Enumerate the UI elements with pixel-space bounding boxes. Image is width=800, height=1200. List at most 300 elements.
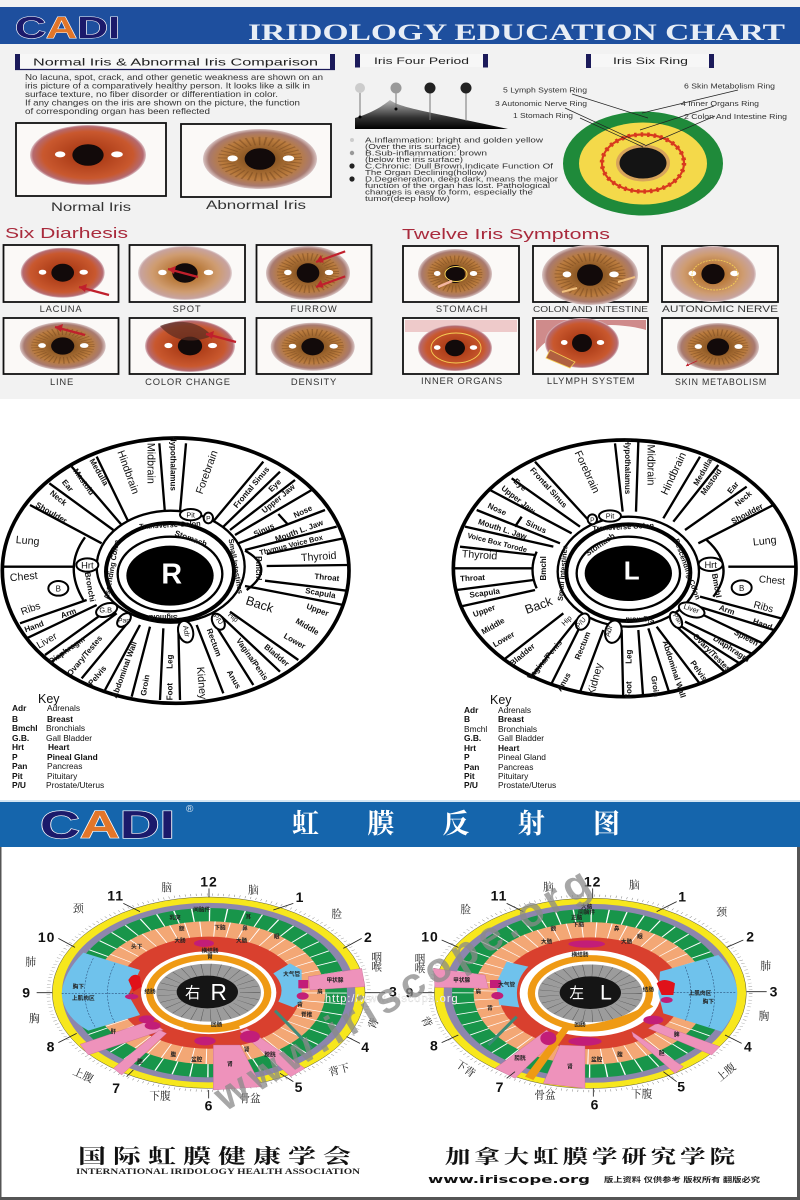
marker: red heart (128, 975, 142, 992)
labels: right iris organs: Neck (48, 489, 69, 508)
legend: right iris key: Bmchl (12, 723, 38, 733)
footer: canadian iris institute: 加拿大虹膜学研究学院 (445, 1145, 739, 1168)
labels: left iris organs: Ear (725, 480, 741, 496)
labels: right iris organs: Kidney (194, 666, 209, 700)
legend: four period stages: D.Degeneration, deep dark, means the major (365, 174, 559, 184)
legend: left iris key: Adrenals (498, 705, 531, 715)
tiny organ labels: right map: 盆腔 (191, 1056, 203, 1064)
legend: right iris key: Hrt (12, 742, 24, 752)
hour labels: left map (406, 874, 778, 1113)
labels: left iris organs: Mastoid (699, 467, 724, 497)
tiny organ labels: left map: 眼 (637, 933, 643, 940)
tiny organ labels: right map: 大肠 (236, 937, 248, 945)
labels: six rings: 1 Stomach Ring (513, 113, 573, 120)
body region labels: right map: 喉 (371, 962, 382, 974)
legend: right iris key: Pineal Gland (47, 752, 98, 762)
photo: color change: COLOR CHANGE (145, 376, 231, 387)
labels: left iris organs: Mouth L. Jaw (477, 517, 529, 542)
labels: right iris organs: Nose (292, 503, 314, 520)
ring leader lines (565, 90, 738, 147)
labels: left iris organs: Upper Jaw (500, 484, 538, 516)
tiny organ labels: right map: 额 (179, 925, 185, 933)
legend: left iris key: Gall Bladder (498, 733, 544, 743)
legend: left iris key: Pit (464, 771, 475, 781)
legend: left iris key: Pineal Gland (498, 752, 546, 762)
tiny organ labels: right map: 胃 (207, 953, 213, 960)
tiny organ labels: left map: 鼻 (614, 925, 620, 933)
tiny organ labels: left map: 正脑 (571, 913, 583, 921)
labels: left iris organs: Hypothalamus (623, 439, 632, 495)
labels: left iris organs: Thyroid (461, 548, 498, 563)
photo: normal iris (16, 123, 166, 214)
legend: four period stages: A.Inflammation: bright and golden yellow (365, 136, 544, 144)
hour labels: left map: 11 (491, 888, 507, 904)
labels: right iris organs: Anus (225, 669, 243, 691)
hour labels: right map: 8 (47, 1038, 55, 1054)
heading box: normal vs abnormal (15, 54, 335, 70)
labels: right iris organs: Liver (35, 631, 60, 651)
photo: autonomic nerve (662, 246, 778, 314)
legend: right iris key: Pituitary (47, 771, 78, 781)
legend: left iris key: P/U (464, 780, 478, 790)
sector: right blue bronchial (273, 963, 302, 1007)
chart: four period depth (355, 82, 508, 129)
tiny organ labels: right map: 下脑 (214, 923, 226, 931)
tiny organ labels: left map: 大肠 (621, 937, 633, 945)
ovals: right iris key organs: P (206, 516, 211, 523)
labels: right iris organs: Leg (165, 654, 174, 669)
labels: right iris organs: Shoulder (34, 500, 68, 525)
tiny organ labels: right map: 间脑件 (193, 906, 210, 914)
photo: colon and intestine: COLON AND INTESTINE (533, 305, 648, 314)
labels: left iris organs: Kidney (585, 661, 606, 697)
photo: line (4, 318, 118, 387)
labels: left iris organs: Hindbrain (659, 450, 689, 497)
labels: right iris organs: Hindbrain (114, 449, 141, 496)
tiny organ labels: right map: 肝 (111, 1028, 117, 1035)
hour labels: left map: 3 (770, 983, 778, 999)
hour labels: right map: 5 (295, 1079, 303, 1095)
labels: left iris organs: Vagina/Penis (525, 638, 564, 682)
text block: comparison description: If any changes on the iris are shown on the picture, the function (25, 98, 300, 108)
tiny organ labels: right map: 耳 (246, 913, 252, 920)
labels: right iris organs: Mastoid (71, 467, 96, 497)
body region labels: right map: 下腹 (149, 1090, 171, 1103)
heading box: normal vs abnormal: Normal Iris & Abnormal Iris Comparison (33, 56, 318, 68)
hour labels: right map: 3 (389, 984, 398, 1000)
footer: canadian iris institute (428, 1145, 760, 1186)
ovals: right iris key organs: Adr (181, 625, 192, 638)
labels: right iris organs: Abdominal Wall (110, 640, 139, 699)
tiny organ labels: left map: 横结肠 (572, 951, 589, 959)
photo: spot (130, 245, 245, 314)
footer: international iridology health association (76, 1144, 360, 1176)
labels: right iris organs: Hand (23, 619, 45, 634)
labels: left iris organs: Eye (512, 477, 529, 493)
tiny organ labels: right map: 胸下 (73, 982, 84, 990)
text block: comparison description: of corresponding organ has been reflected (25, 107, 210, 116)
labels: left iris organs: Diaphragm (711, 634, 751, 664)
labels: left iris organs: Pelvis (688, 659, 709, 683)
legend: four period stages: function of the organ has lost. Pathological (365, 181, 550, 190)
tiny organ labels: right map (72, 906, 344, 1068)
tiny organ labels: right map: 上肌肉区 (72, 994, 95, 1002)
body region labels: left map: 咽 (415, 954, 426, 966)
legend: right iris key: G.B. (12, 733, 29, 743)
photo: lymph system: LLYMPH SYSTEM (547, 375, 635, 386)
hour labels: right map: 2 (364, 929, 373, 945)
tiny organ labels: right map: 头下 (131, 942, 143, 950)
sector: thyroid, pink (308, 968, 365, 990)
body region labels: right map: 脸 (331, 908, 342, 921)
tiny organ labels: left map: 膀胱 (514, 1054, 526, 1062)
tiny organ labels: right map: 背 (297, 1001, 303, 1009)
body region labels: left map: 胸 (759, 1010, 770, 1023)
diagram: six ring iris (563, 90, 738, 216)
legend: right iris key: Pancreas (47, 761, 82, 771)
tiny organ labels: right map: 结肠 (144, 987, 156, 995)
body region labels: right map: 胸 (29, 1012, 40, 1025)
duct: teal line (488, 1017, 517, 1045)
tiny organ labels: right map: 肩 (317, 987, 323, 995)
legend: left iris key: Bmchl (464, 724, 487, 734)
labels: left iris organs: Spleen (732, 628, 760, 648)
labels: left iris organs: Frontal Sinus (528, 466, 569, 510)
labels: right iris organs (9, 436, 340, 700)
panel: education chart background (0, 0, 800, 399)
labels: right iris organs: Diaphragm (47, 635, 87, 666)
labels: right iris organs: Pelvis (87, 664, 109, 687)
legend: left iris key: Bronchials (498, 724, 537, 734)
tiny organ labels: right map: 胆 (137, 1058, 143, 1065)
title: IRIDOLOGY EDUCATION CHART (248, 20, 785, 45)
legend: right iris key (12, 692, 104, 790)
tiny organ labels: right map: 腹 (171, 1051, 177, 1059)
legend: left iris key: Pancreas (498, 762, 533, 772)
photo: autonomic nerve: AUTONOMIC NERVE (662, 304, 778, 314)
sector: lung and chest, blue (62, 953, 140, 1031)
text block: comparison description (25, 73, 323, 116)
tiny organ labels: left map: 大肠 (541, 937, 553, 945)
labels: six rings: 3 Autonomic Nerve Ring (495, 101, 587, 108)
legend: right iris key: Adrenals (47, 703, 80, 713)
text block: comparison description: No lacuna, spot, crack, and other genetic weakness are shown on an (25, 73, 323, 82)
body region labels: left map: 骨盆 (534, 1089, 556, 1102)
body region labels: right map: 背 (365, 1016, 382, 1031)
panel: chinese chart frame (0, 847, 800, 1200)
labels: left iris organs: Nose (486, 501, 508, 518)
labels: left iris organs: Anus (555, 671, 573, 693)
labels: right iris organs: Rectum (205, 627, 223, 658)
body region labels: right map: 脑 (248, 885, 259, 897)
labels: left iris organs: Stomach (584, 531, 617, 558)
legend: right iris key: Key (38, 692, 60, 706)
legend: left iris key: Pan (464, 762, 479, 772)
arcs: chest subdivisions (663, 960, 737, 1028)
ovals: right iris key organs: Pit (186, 510, 195, 519)
labels: right iris organs: Bronchi (83, 571, 97, 603)
tiny organ labels: right map: 回肠 (211, 1021, 223, 1029)
tiny organ labels: right map: 大气管 (283, 970, 300, 978)
body region labels: right map: 上腹 (71, 1065, 96, 1086)
legend: four period stages: tumor(deep hollow) (365, 194, 451, 203)
labels: right iris organs: Ribs (20, 601, 42, 618)
legend: left iris key: Breast (498, 714, 524, 724)
ovals: left iris key organs: Pit (606, 512, 614, 521)
marker: red heart (657, 980, 675, 995)
body region labels: left map: 下腹 (631, 1087, 653, 1100)
tiny organ labels: right map: 脊椎 (301, 1011, 313, 1019)
photo: skin metabolism (662, 318, 778, 387)
labels: right iris organs: Foot (165, 683, 174, 700)
hour labels: right map: 6 (205, 1098, 213, 1114)
logo: CADI: C A DI (40, 804, 175, 847)
panel: right iris wheel (2, 436, 349, 703)
pupil: right map: 右 (185, 985, 200, 1002)
legend: right iris key: Pan (12, 761, 27, 771)
body region labels: left map: 脑 (629, 880, 640, 892)
labels: right iris organs: Back (244, 594, 276, 616)
text block: comparison description: surface texture, no fiber disorder or differentiation in color. (25, 90, 278, 99)
labels: right iris organs: Throat (314, 572, 340, 583)
hour labels: left map: 10 (421, 928, 439, 944)
labels: left iris organs: Leg (625, 649, 634, 664)
tiny organ labels: right map: 眼 (274, 933, 280, 940)
hour ticks: left map (418, 888, 767, 1097)
labels: right iris organs: Mouth L. Jaw (274, 518, 325, 544)
tiny organ labels: left map (453, 902, 714, 1070)
hour labels: left map: 2 (746, 928, 755, 944)
labels: right iris organs: Ascending Colon (102, 539, 121, 600)
labels: left iris organs: Foot (625, 681, 634, 699)
legend: right iris key: Adr (12, 703, 27, 713)
legend: left iris key: Pituitary (498, 771, 529, 781)
tiny organ labels: left map: 间脑件 (578, 908, 595, 916)
labels: right iris organs: Transverse Colon (139, 519, 201, 531)
labels: right iris organs: Sinus (252, 521, 276, 539)
body region labels: left map: 脸 (460, 903, 471, 916)
tiny organ labels: left map: 额 (551, 925, 557, 933)
legend: left iris key: Prostate/Uterus (498, 780, 556, 790)
hour labels: right map: 10 (38, 929, 55, 945)
legend: right iris key: Prostate/Uterus (46, 780, 104, 790)
pupil: right map (177, 976, 238, 1008)
photo: density: DENSITY (291, 376, 337, 387)
rings: right map (48, 895, 369, 1091)
tiny organ labels: left map: 甲状腺 (453, 976, 470, 984)
labels: right iris organs: Midbrain (144, 443, 156, 484)
heading box: iris four period (355, 54, 488, 68)
labels: left iris organs: Ovary/Testes (691, 632, 733, 674)
pupil: R (126, 546, 214, 606)
hour labels: left map: 7 (496, 1079, 504, 1095)
sector: lung and chest, blue (658, 955, 737, 1032)
tiny organ labels: right map: 鼻 (242, 924, 248, 932)
body region labels: left map: 下背 (453, 1057, 478, 1080)
footer: international iridology health association: 国际虹膜健康学会 (78, 1144, 358, 1168)
ovals: left iris key organs (559, 510, 752, 645)
strip: orange descending (525, 1004, 653, 1080)
pupil: right map: R (210, 979, 227, 1005)
legend: left iris key: Adr (464, 705, 479, 715)
chart: left iris reflex map (406, 874, 778, 1113)
hour labels: right map: 1 (296, 889, 304, 905)
labels: right iris organs: Ear (60, 478, 75, 494)
labels: left iris organs: Lung (752, 534, 777, 549)
sector: back, pink (240, 1028, 305, 1077)
photo: skin metabolism: SKIN METABOLISM (675, 377, 767, 387)
panel: left iris wheel (453, 439, 797, 703)
body region labels: right map: 肺 (25, 955, 36, 968)
sector: pelvis, pink (543, 1045, 585, 1088)
photo: lacuna: LACUNA (40, 303, 82, 314)
legend: right iris key: Breast (47, 714, 73, 724)
labels: left iris organs: Midbrain (644, 445, 656, 486)
chart: right iris reflex map (22, 874, 398, 1114)
ovals: left iris key organs: Hip (559, 613, 574, 628)
photo: lymph system (533, 318, 648, 386)
labels: six rings (495, 84, 787, 121)
ovals: left iris key organs: Hrt (704, 560, 717, 570)
photo: furrow: FURROW (291, 303, 337, 314)
legend: four period stages: (Over the iris surface) (365, 142, 461, 151)
markers: magenta organs (490, 940, 673, 1046)
body region labels: right map: 颈 (73, 903, 84, 915)
pupil: L (585, 546, 672, 601)
labels: right iris organs: Lung (15, 534, 40, 548)
hour labels: right map: 9 (22, 984, 31, 1000)
photo: stomach: STOMACH (436, 303, 488, 314)
ovals: left iris key organs: B (739, 584, 744, 593)
logo registered mark: ® (186, 804, 194, 815)
hour labels: left map: 4 (744, 1038, 753, 1054)
labels: left iris organs: Neck (733, 489, 754, 508)
ovals: right iris key organs: Pan (118, 617, 130, 624)
tiny organ labels: right map: 膀胱 (264, 1051, 276, 1059)
labels: six rings: 4 Inner Organs Ring (681, 101, 759, 108)
labels: left iris organs: Ribs (752, 600, 774, 615)
labels: right iris organs: Small Intestines (227, 538, 245, 594)
tiny organ labels: left map: 脾 (674, 1031, 680, 1039)
watermark: small url: http://www.iriscope.org (325, 993, 459, 1005)
tiny organ labels: left map: 肾 (567, 1062, 573, 1070)
hour labels: left map: 5 (677, 1078, 686, 1094)
labels: six rings: 5 Lymph System Ring (503, 88, 587, 94)
ovals: right iris key organs: B (56, 585, 61, 594)
photo: stomach (403, 246, 519, 314)
pupil: R: R (161, 559, 182, 591)
body region labels: right map: 骨盆 (239, 1092, 261, 1105)
body region labels: left map: 上腹 (714, 1060, 739, 1084)
heading box: iris six ring (586, 54, 714, 68)
heading: twelve iris symptoms: Twelve Iris Symptoms (402, 227, 610, 243)
labels: right iris organs: Medulla (88, 457, 110, 488)
labels: left iris organs: Medulla (692, 456, 714, 487)
hour labels: right map: 7 (112, 1080, 121, 1096)
ovals: left iris key organs: P (590, 517, 595, 524)
legend: left iris key: P (464, 752, 470, 762)
legend: right iris key: Heart (48, 742, 70, 752)
labels: left iris organs: Small Intestines (556, 545, 569, 601)
tiny organ labels: right map: 大肠 (174, 937, 186, 945)
labels: left iris organs: Abdominal Wall (661, 639, 688, 699)
legend: right iris key: Gall Bladder (46, 733, 92, 743)
photo: abnormal iris: Abnormal Iris (206, 200, 306, 212)
sector: back, pink (495, 1030, 557, 1078)
sector: upper abdomen, pink (648, 1023, 720, 1055)
photo: furrow (256, 242, 372, 314)
labels: right iris organs: Eye (267, 477, 283, 494)
hour ticks: right map (37, 888, 385, 1098)
rings: left map (430, 896, 751, 1091)
labels: right iris organs: Groin (139, 674, 152, 696)
sector: pelvis, pink (213, 1045, 262, 1090)
duct: teal line (275, 1011, 312, 1048)
heading box: iris six ring: Iris Six Ring (613, 56, 688, 67)
photo: lacuna (4, 245, 118, 314)
tiny organ labels: left map: 胸下 (703, 997, 714, 1005)
legend: left iris key: G.B. (464, 733, 481, 743)
hour labels: left map: 1 (678, 888, 687, 904)
tiny organ labels: right map: 乳突 (169, 913, 181, 921)
text block: comparison description: iris picture of a comparatively healthy person. It looks like a silk in (25, 82, 310, 90)
body region labels: left map: 颈 (716, 906, 727, 918)
labels: left iris organs: Shoulder (730, 502, 765, 526)
ovals: right iris key organs: P/U (212, 613, 224, 626)
ovals: right iris key organs: Hip (226, 610, 240, 624)
body region labels: left map: 喉 (415, 963, 426, 975)
body region labels: right map (25, 882, 382, 1105)
header band: iridology education chart (0, 7, 800, 45)
hour labels: left map: 9 (406, 984, 414, 1000)
labels: left iris organs: Bmchl (539, 556, 548, 581)
labels: right iris organs: Upper (305, 602, 330, 618)
hour labels: right map: 4 (361, 1039, 370, 1055)
pupil: left map: 左 (569, 985, 584, 1002)
labels: right iris organs: Stomach (173, 529, 208, 549)
strip: orange extension (183, 1023, 240, 1032)
labels: left iris organs: Throat (460, 573, 486, 583)
labels: right iris organs: Upper Jaw (260, 482, 297, 515)
legend: four period stages: C.Chronic: Dull Brown,Indicate Function Of (365, 162, 554, 170)
labels: left iris organs: Transverse Colon (592, 521, 655, 533)
pupil: L: L (624, 556, 640, 586)
labels: left iris organs: Rectum (573, 630, 592, 661)
labels: left iris organs: Bladder (508, 642, 537, 668)
arcs: chest subdivisions (62, 958, 133, 1027)
hour labels: left map: 6 (591, 1097, 599, 1113)
watermark: diagonal url: www.iriscope.org (205, 858, 598, 1120)
body region labels: right map: 脑 (161, 882, 172, 894)
photo: density (256, 318, 372, 387)
photo: colon and intestine (533, 245, 648, 314)
labels: six rings: 6 Skin Metabolism Ring (684, 84, 775, 90)
labels: right iris organs: Ovary/Testes (65, 633, 104, 678)
labels: left iris organs: Voice Box Torode (466, 531, 528, 554)
logo: CADI: C A DI (15, 10, 120, 45)
legend: right iris key: Pit (12, 771, 23, 781)
labels: left iris organs: Scapula (469, 587, 501, 600)
legend: four period stages (349, 136, 559, 203)
body region labels: left map (415, 880, 771, 1102)
sector: lower abdomen, pink (632, 1032, 683, 1073)
photo: color change (130, 318, 245, 387)
tiny organ labels: right map: 肾 (244, 1046, 250, 1054)
hour labels: left map: 12 (584, 874, 601, 890)
tiny organ labels: left map: 下脑 (573, 921, 584, 929)
body region labels: right map: 咽 (371, 952, 382, 964)
footer: international iridology health association: INTERNATIONAL IRIDOLOGY HEALTH ASSOCIATION (76, 1167, 360, 1176)
